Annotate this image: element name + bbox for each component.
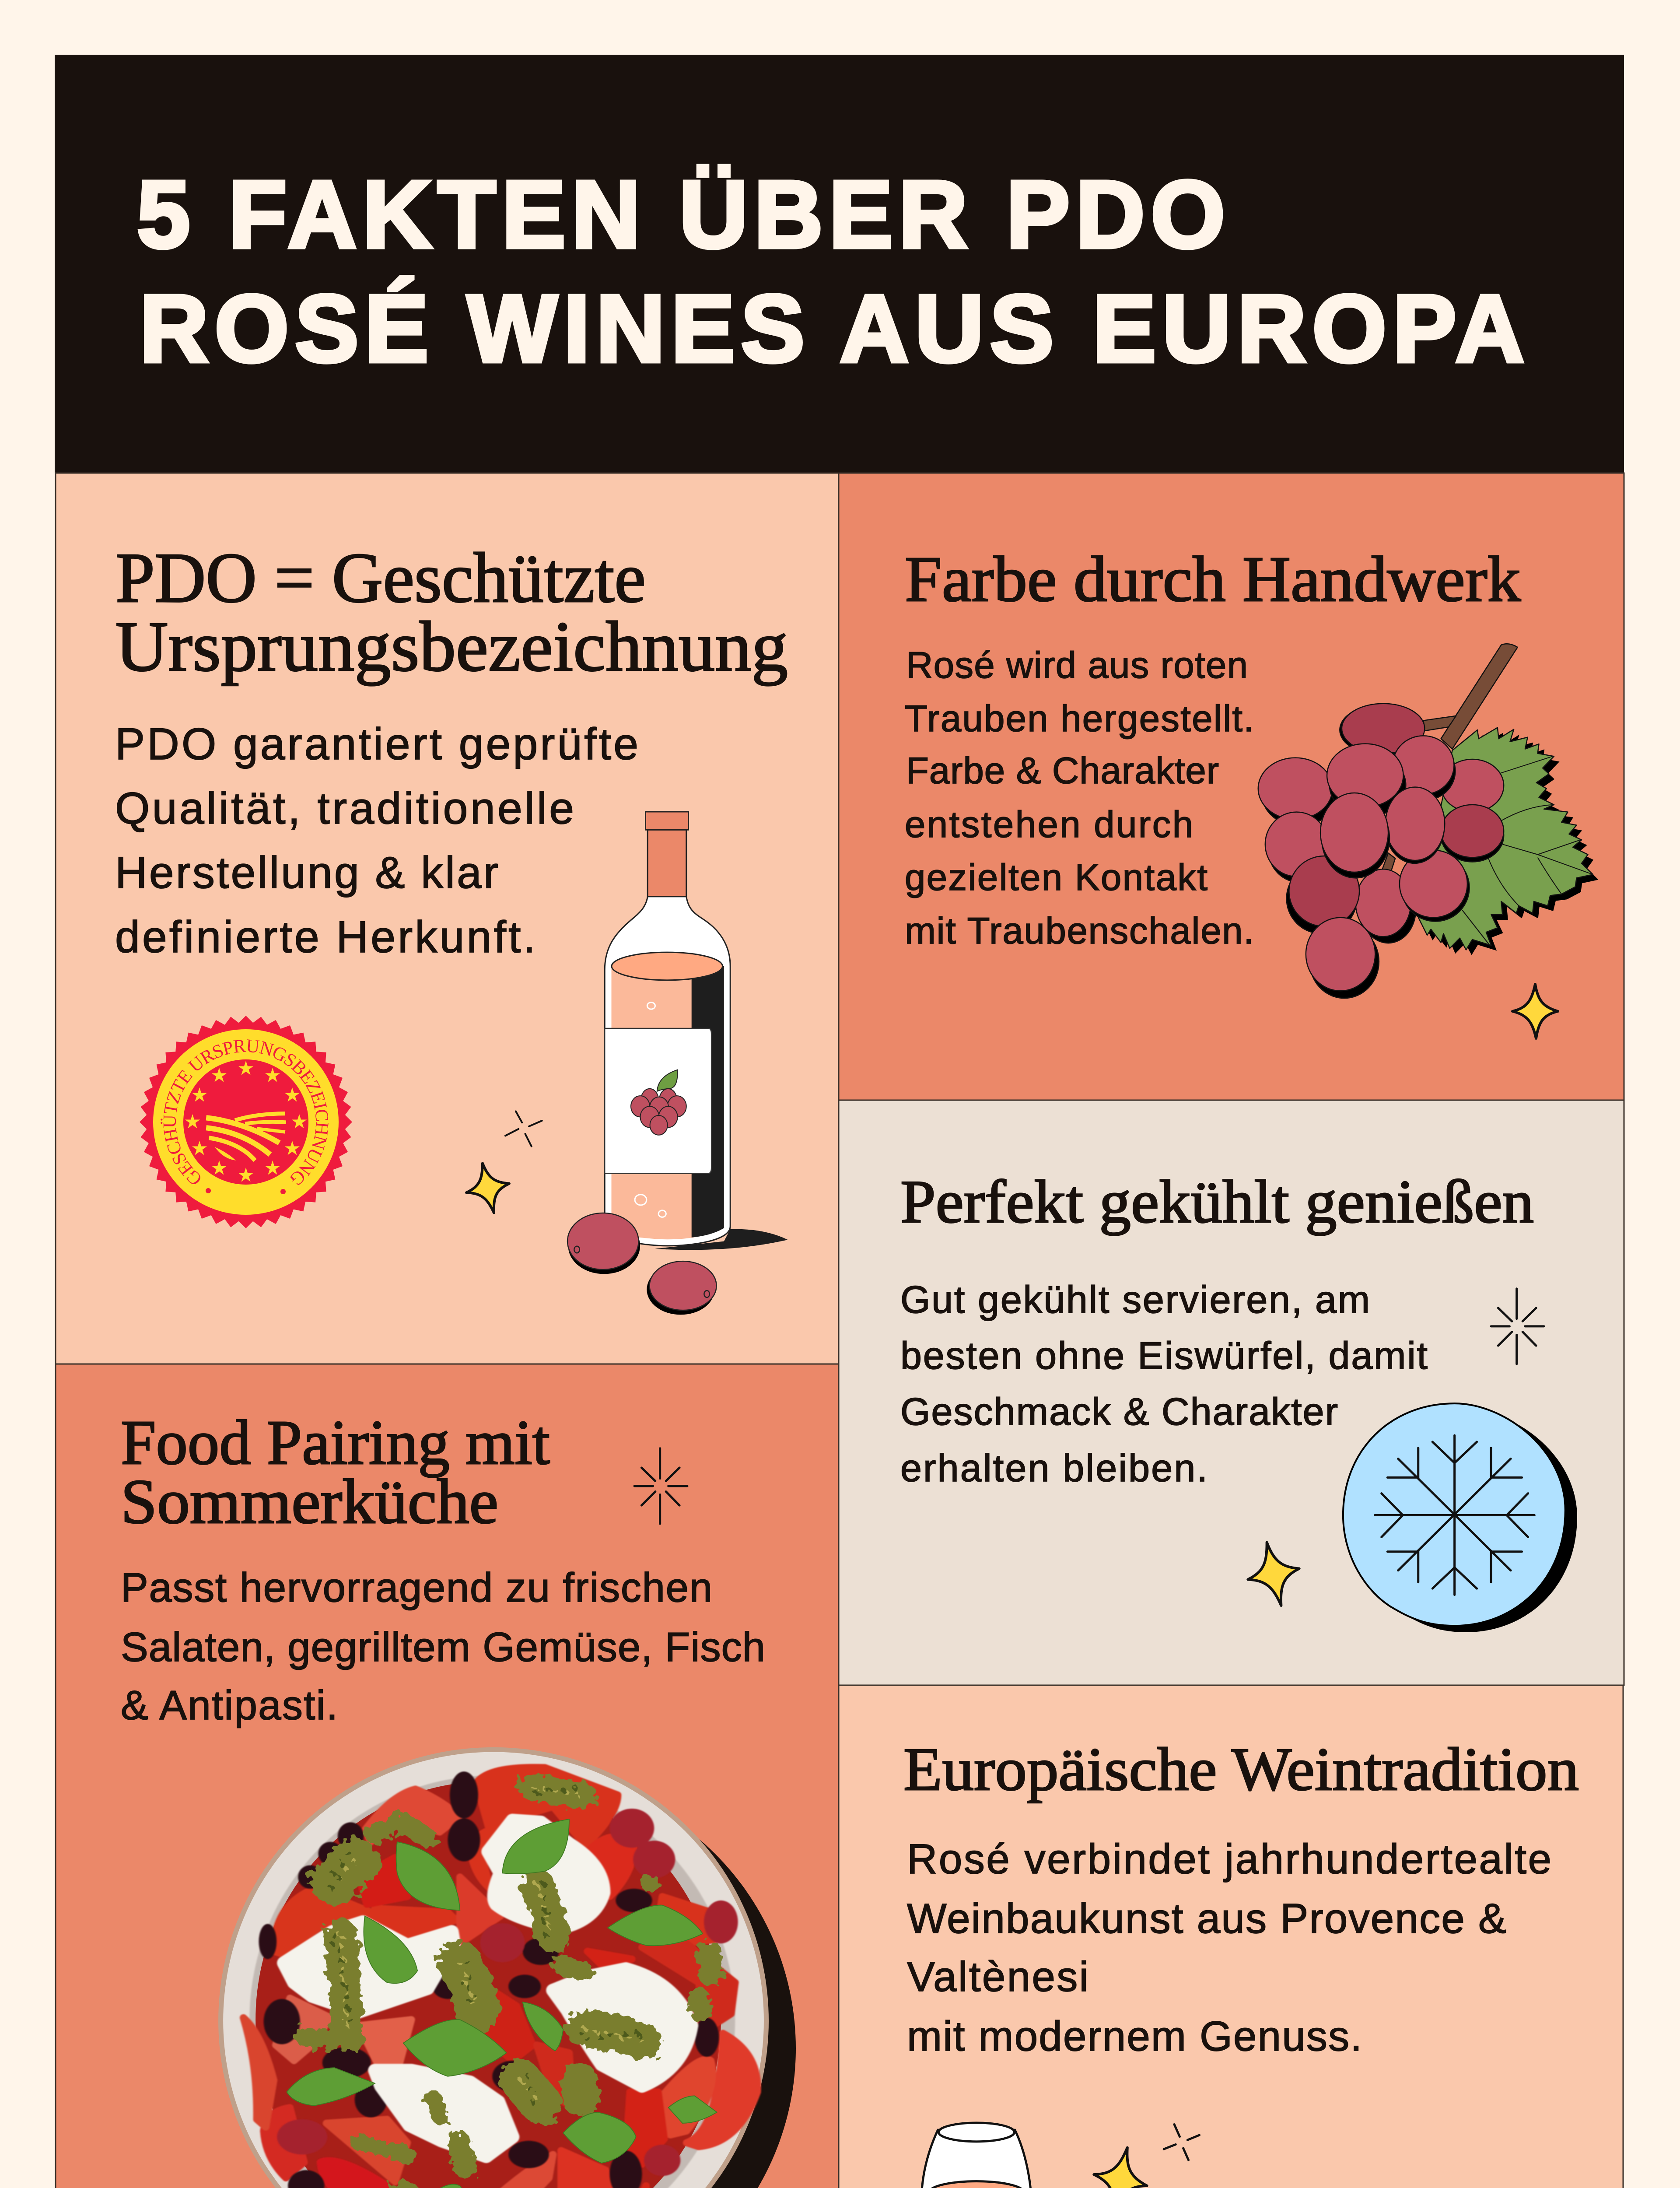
icon: PDO seal: GESCHÜTZTE URSPRUNGSBEZEICHNUNG: [160, 1035, 332, 1190]
text: Perfekt body: erhalten bleiben.: [900, 1446, 1208, 1490]
title: 5 FAKTEN ÜBER PDO: [137, 161, 1225, 268]
grapes: [1258, 704, 1504, 998]
text: Farbe body: entstehen durch: [905, 804, 1193, 845]
text: PDO body: [115, 719, 638, 962]
heading: PDO: PDO = Geschützte: [116, 539, 646, 617]
text: Perfekt body: Geschmack & Charakter: [900, 1390, 1338, 1433]
panel: PDO definition: [56, 473, 839, 1364]
icon: PDO seal: [140, 1016, 352, 1228]
icon: sparkle small: [505, 1111, 542, 1147]
icon: yellow star: [1241, 1537, 1306, 1611]
text: Farbe body: Trauben hergestellt.: [905, 698, 1254, 740]
text: Farbe body: [905, 645, 1254, 952]
icon: sparkle: [634, 1448, 687, 1524]
heading: PDO: Ursprungsbezeichnung: [116, 607, 788, 686]
basil leaves: [287, 1819, 717, 2188]
stem: [1318, 644, 1518, 880]
pesto: [306, 1787, 711, 2188]
text: Farbe body: gezielten Kontakt: [905, 857, 1208, 898]
cherries: [259, 1771, 738, 2188]
icon: label grapes: [631, 1070, 686, 1135]
panel: Perfekt gekühlt genießen: [839, 1100, 1624, 1685]
heading: Food Pairing: Sommerküche: [121, 1467, 498, 1537]
leaf: [1418, 728, 1599, 955]
text: Farbe body: mit Traubenschalen.: [905, 910, 1254, 952]
title: ROSÉ WINES AUS EUROPA: [140, 276, 1524, 382]
title: [137, 161, 1524, 382]
heading: Perfekt: Perfekt gekühlt genießen: [900, 1168, 1534, 1236]
plate shadow: [246, 1774, 796, 2188]
text: PDO body: PDO garantiert geprüfte: [115, 719, 638, 769]
heading: PDO: [116, 539, 788, 686]
panel: Farbe durch Handwerk: [839, 473, 1624, 1100]
text: Farbe body: Farbe & Charakter: [906, 750, 1219, 792]
heading: Farbe: Farbe durch Handwerk: [905, 543, 1521, 615]
icon: wine bottle: [567, 812, 788, 1315]
icon: sparkle small: [1164, 2125, 1199, 2160]
icon: wine glass: [921, 2123, 1052, 2188]
text: PDO body: Herstellung & klar: [115, 848, 498, 898]
heading: Food Pairing: [121, 1408, 550, 1537]
tomatoes: [243, 1767, 757, 2188]
panel: Food Pairing: [56, 1364, 839, 2188]
text: Food body: [121, 1564, 765, 1728]
text: Food body: Salaten, gegrilltem Gemüse, Fisch: [121, 1624, 765, 1670]
icon: grape left: [567, 1213, 640, 1274]
burrata: [284, 1820, 691, 2156]
icon: snowflake badge: [1343, 1403, 1577, 1632]
icon: yellow star: [461, 1159, 514, 1217]
text: Perfekt body: besten ohne Eiswürfel, damit: [900, 1334, 1428, 1377]
text: Europa body: Rosé verbindet jahrhundertealte: [907, 1836, 1551, 1883]
text: Food body: & Antipasti.: [121, 1682, 338, 1728]
heading: Europäische: Europäische Weintradition: [903, 1736, 1579, 1803]
text: Farbe body: Rosé wird aus roten: [906, 645, 1248, 686]
icon: sparkle: [1491, 1289, 1544, 1364]
photo: salad plate: [218, 1747, 769, 2188]
icon: yellow star: [1087, 2142, 1154, 2188]
icon: grape right: [647, 1261, 717, 1315]
icon: grape bunch: [1258, 644, 1599, 998]
text: Europa body: mit modernem Genuss.: [907, 2013, 1362, 2060]
text: Perfekt body: [900, 1278, 1428, 1490]
text: Europa body: Valtènesi: [907, 1953, 1088, 2000]
text: PDO body: Qualität, traditionelle: [115, 783, 574, 833]
icon: yellow star: [1512, 984, 1558, 1038]
header panel: [55, 55, 1624, 473]
text: Europa body: Weinbaukunst aus Provence &: [907, 1895, 1506, 1942]
text: PDO body: definierte Herkunft.: [115, 912, 536, 962]
text: Europa body: [907, 1836, 1551, 2060]
text: Perfekt body: Gut gekühlt servieren, am: [900, 1278, 1370, 1321]
text: Food body: Passt hervorragend zu frischen: [121, 1564, 712, 1610]
heading: Food Pairing: Food Pairing mit: [121, 1408, 550, 1478]
panel: Europäische Weintradition: [839, 1685, 1623, 2188]
